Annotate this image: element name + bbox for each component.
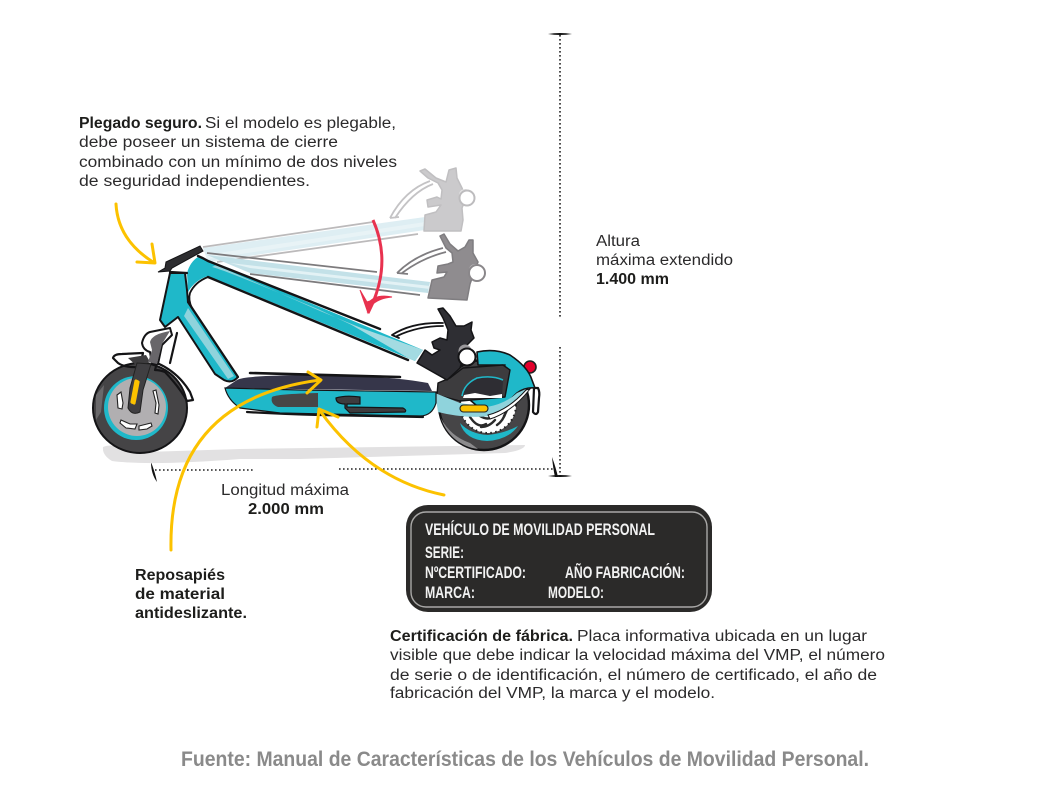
- source note: Fuente: Manual de Características de los Vehículos de Movilidad Personal.: [181, 748, 869, 771]
- deck mat: [225, 373, 432, 391]
- text block: max height: máxima extendido: [596, 252, 733, 269]
- arrow: yellow to latch: [116, 204, 155, 263]
- fork: [128, 363, 151, 413]
- column and lower diagonal tube: [160, 273, 238, 381]
- deck underside line: [247, 412, 423, 417]
- rear light: [524, 361, 536, 373]
- grip panel: [272, 393, 318, 407]
- text block: max length: Longitud máxima: [221, 482, 349, 499]
- text block: factory certification: [390, 628, 885, 702]
- text block: footrest: de material: [135, 586, 225, 603]
- text block: folding: [79, 115, 397, 190]
- certification plate: [406, 505, 712, 612]
- rear bracket: [533, 388, 539, 414]
- arrow: yellow to footrest: [171, 372, 321, 550]
- text block: factory certification: fabricación del VMP, la marca y el modelo.: [390, 685, 715, 702]
- certification plate: NºCERTIFICADO:: [425, 563, 526, 582]
- text block: folding: Si el modelo es plegable,: [205, 115, 396, 132]
- scooter: [93, 246, 539, 453]
- deck: [225, 388, 436, 416]
- rear mudguard: [470, 351, 535, 415]
- text block: footrest: antideslizante.: [135, 605, 247, 622]
- rear wheel: [439, 360, 529, 450]
- certification plate: AÑO FABRICACIÓN:: [565, 562, 685, 582]
- swing arm: [435, 389, 530, 419]
- text block: max height: [596, 233, 733, 288]
- certification plate: SERIE:: [425, 543, 464, 562]
- text block: factory certification: de serie o de identificación, el número de certificado, el año de: [390, 667, 877, 684]
- text block: folding: combinado con un mínimo de dos niveles: [79, 154, 397, 171]
- fork yellow pill: [132, 381, 138, 403]
- height dimension line: [548, 33, 572, 477]
- kickstand: [336, 396, 406, 413]
- front mudguard: [113, 353, 193, 401]
- front wheel: [93, 363, 187, 453]
- certification plate: VEHÍCULO DE MOVILIDAD PERSONAL: [425, 520, 655, 539]
- folding latch: [158, 246, 203, 273]
- ghost stem: upper folding position: [203, 168, 474, 262]
- text block: footrest: Reposapiés: [135, 567, 225, 584]
- length dimension line: [151, 457, 558, 482]
- text block: folding: Plegado seguro.: [79, 115, 202, 132]
- certification plate: MODELO:: [548, 583, 604, 602]
- ghost stem: lower folding position: [207, 234, 485, 300]
- text block: factory certification: visible que debe indicar la velocidad máxima del VMP, el número: [390, 647, 885, 664]
- steering column lower: [170, 333, 177, 363]
- text block: max height: 1.400 mm: [596, 271, 669, 288]
- arrow: yellow to certification plate location: [317, 409, 444, 495]
- text block: max height: Altura: [596, 233, 640, 250]
- head piece: [142, 328, 172, 364]
- arrow: red folding: [360, 220, 392, 313]
- text block: folding: de seguridad independientes.: [79, 173, 310, 190]
- yellow pill: [460, 405, 488, 412]
- text block: max length: [221, 482, 349, 518]
- certification plate: MARCA:: [425, 583, 475, 602]
- text block: footrest: [135, 567, 247, 622]
- rear swing housing: [437, 365, 510, 401]
- main tube: [187, 256, 423, 361]
- housing window: [462, 377, 503, 398]
- text block: factory certification: Certificación de fábrica.: [390, 628, 573, 645]
- text block: folding: debe poseer un sistema de cierre: [79, 134, 338, 151]
- text block: max length: 2.000 mm: [248, 501, 324, 518]
- text block: factory certification: Placa informativa ubicada en un lugar: [577, 628, 867, 645]
- folded handle on scooter: [392, 308, 476, 380]
- ground shadow: [103, 445, 525, 463]
